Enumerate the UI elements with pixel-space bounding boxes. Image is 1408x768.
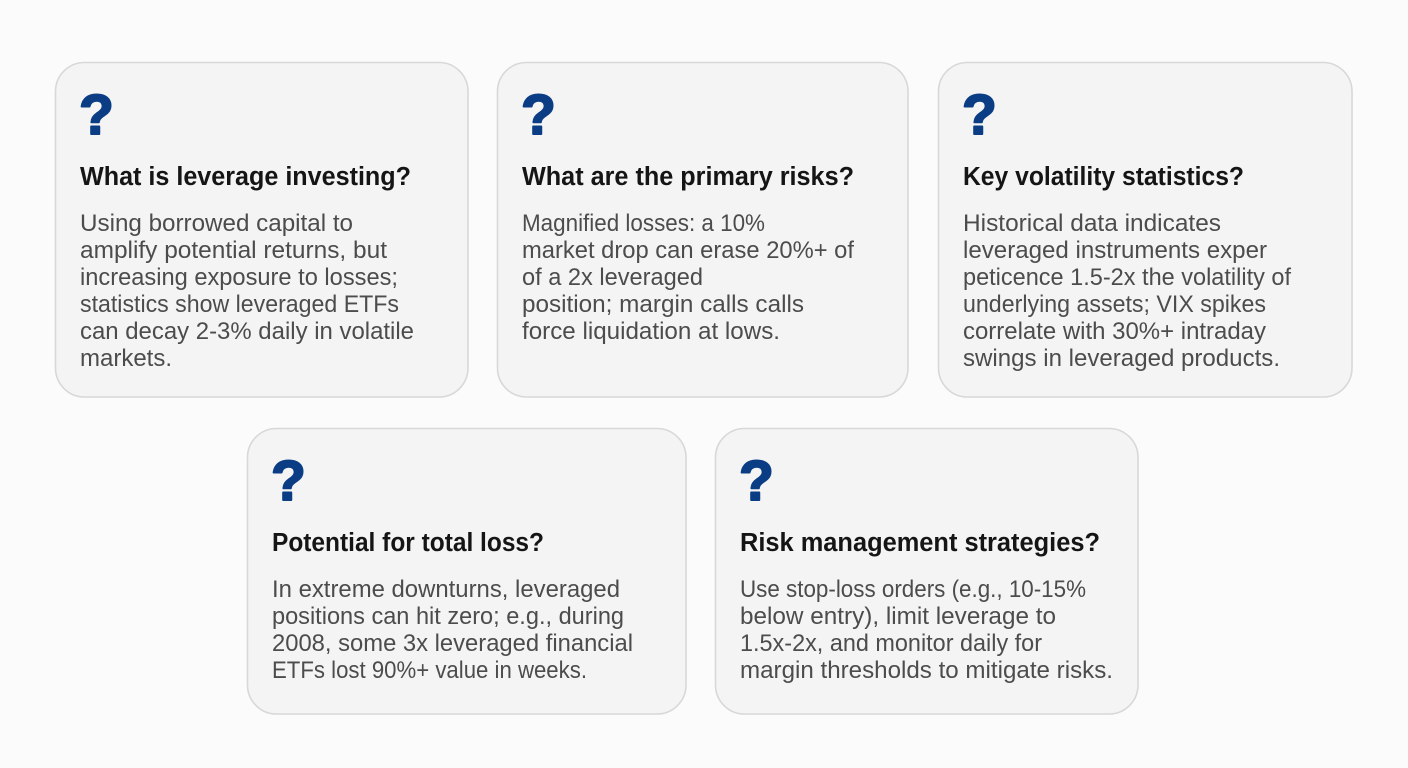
text block: leverage definition: Using borrowed capital to	[80, 210, 353, 237]
icon: question mark: ?	[521, 83, 556, 147]
panel: key volatility statistics	[938, 62, 1352, 397]
text block: leverage definition: can decay 2-3% daily in volatile	[80, 318, 414, 345]
text block: volatility statistics: peticence 1.5-2x the volatility of	[963, 264, 1291, 291]
text block: total loss description: ETFs lost 90%+ value in weeks.	[272, 657, 587, 684]
text block: leverage definition	[80, 210, 414, 372]
text block: volatility statistics: underlying assets; VIX spikes	[963, 291, 1266, 318]
text block: risks description: Magnified losses: a 10%	[522, 210, 765, 237]
text block: risk management description: below entry), limit leverage to	[740, 603, 1056, 630]
text block: leverage definition: markets.	[80, 345, 172, 372]
text block: risks description: force liquidation at lows.	[522, 318, 780, 345]
text block: risk management description	[740, 576, 1113, 684]
text block: risks description: position; margin calls calls	[522, 291, 804, 318]
panel: what is leverage investing	[56, 62, 468, 397]
heading: key volatility statistics: Key volatility statistics?	[963, 163, 1244, 191]
text block: leverage definition: amplify potential returns, but	[80, 237, 387, 264]
panel: potential for total loss	[248, 428, 686, 714]
text block: volatility statistics: leveraged instruments exper	[963, 237, 1267, 264]
heading: what is leverage investing: What is leverage investing?	[80, 163, 411, 191]
text block: leverage definition: increasing exposure to losses;	[80, 264, 398, 291]
panel: risk management strategies	[716, 428, 1138, 714]
text block: volatility statistics: correlate with 30%+ intraday	[963, 318, 1266, 345]
icon: question mark: ?	[271, 449, 306, 513]
text block: risk management description: margin thresholds to mitigate risks.	[740, 657, 1113, 684]
icon: question mark: ?	[79, 83, 114, 147]
heading: potential for total loss: Potential for total loss?	[272, 529, 544, 557]
text block: volatility statistics	[963, 210, 1291, 372]
text block: total loss description: positions can hit zero; e.g., during	[272, 603, 624, 630]
text block: volatility statistics: Historical data indicates	[963, 210, 1221, 237]
icon: question mark: ?	[962, 83, 997, 147]
heading: primary risks: What are the primary risks?	[522, 163, 854, 191]
text block: volatility statistics: swings in leveraged products.	[963, 345, 1280, 372]
text block: risks description	[522, 210, 854, 345]
icon: question mark: ?	[739, 449, 774, 513]
text block: risk management description: 1.5x-2x, and monitor daily for	[740, 630, 1042, 657]
text block: risk management description: Use stop-loss orders (e.g., 10-15%	[740, 576, 1086, 603]
text block: risks description: of a 2x leveraged	[522, 264, 703, 291]
text block: total loss description: In extreme downturns, leveraged	[272, 576, 620, 603]
text block: total loss description	[272, 576, 633, 684]
text block: total loss description: 2008, some 3x leveraged financial	[272, 630, 633, 657]
heading: risk management strategies: Risk management strategies?	[740, 529, 1100, 557]
panel: primary risks	[498, 62, 908, 397]
text block: leverage definition: statistics show leveraged ETFs	[80, 291, 399, 318]
text block: risks description: market drop can erase 20%+ of	[522, 237, 854, 264]
